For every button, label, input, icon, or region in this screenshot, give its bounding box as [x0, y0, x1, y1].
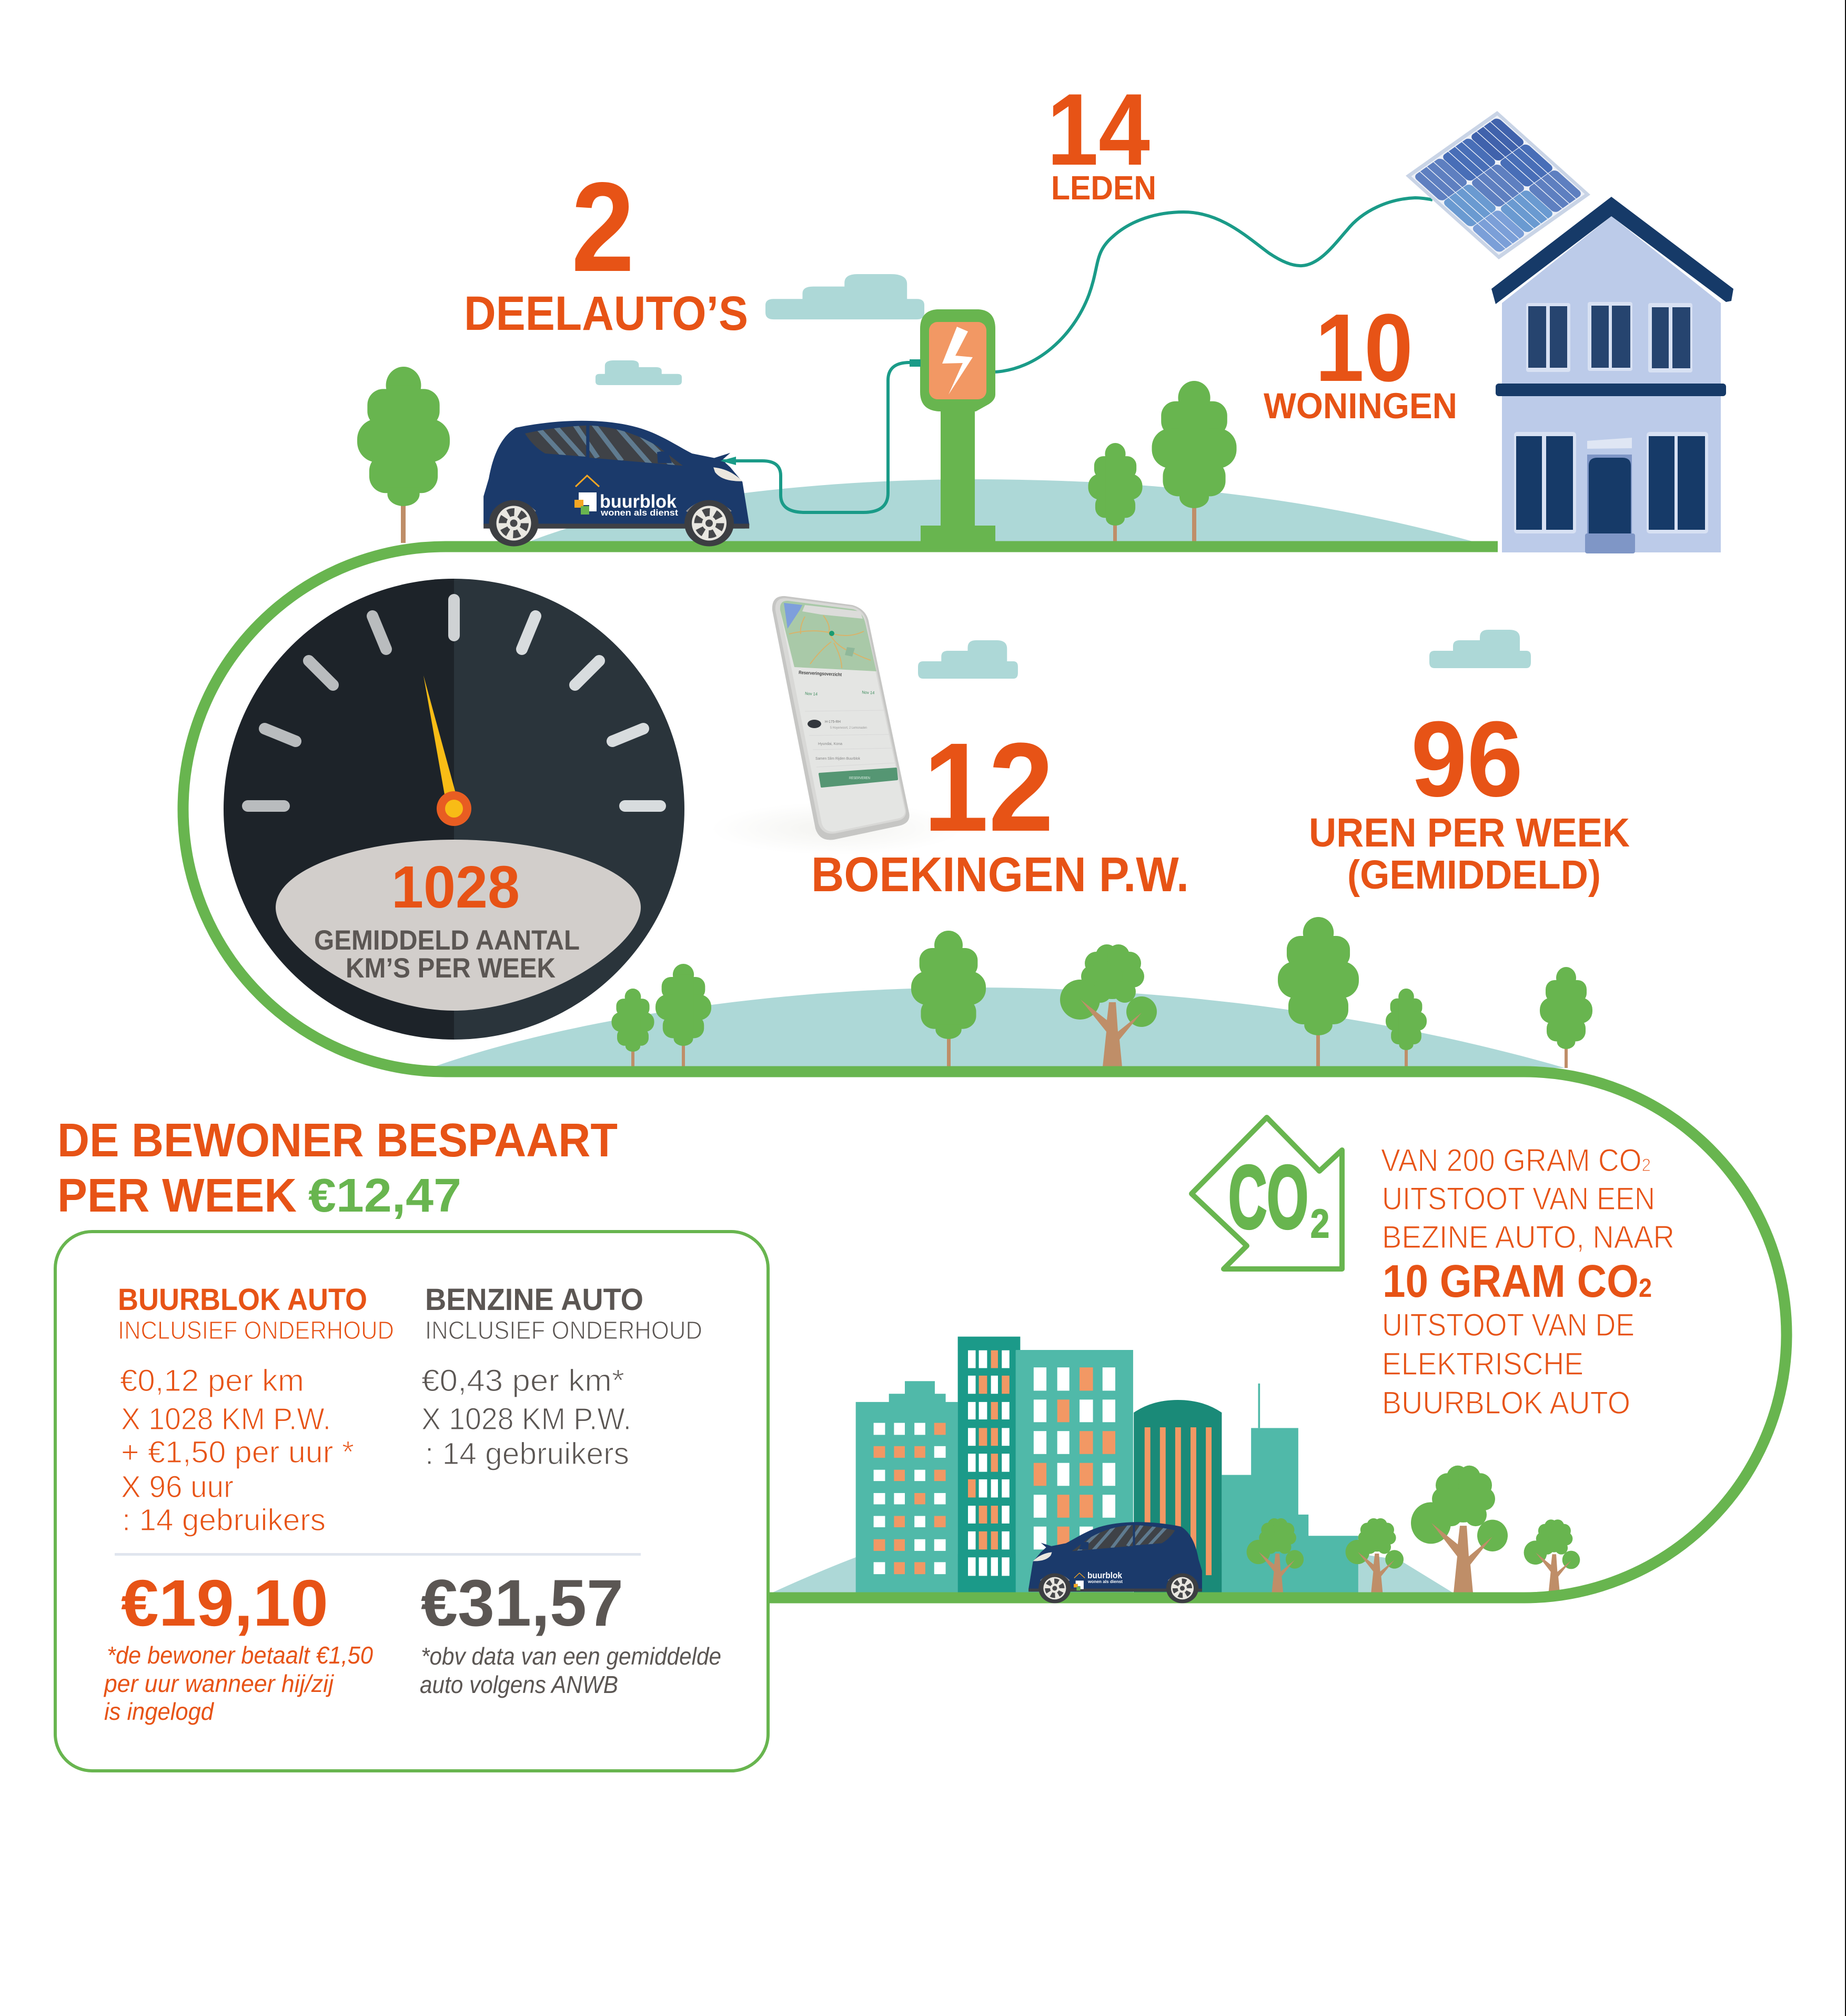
gauge ticks: [248, 600, 660, 806]
upper windows: [1526, 302, 1692, 372]
stat: 96 uren: (GEMIDDELD): [1347, 852, 1601, 898]
CO2 text block: 10 GRAM CO2: [1383, 1256, 1652, 1307]
app sheet text: [798, 670, 876, 700]
footnote: benzine: [420, 1642, 721, 1698]
savings heading: €12,47: [308, 1170, 461, 1222]
house: [1491, 197, 1733, 553]
CO2 text block: BEZINE AUTO, NAAR: [1382, 1219, 1674, 1255]
stat: 10 woningen: 10: [1315, 294, 1413, 401]
stat: 12 boekingen: [811, 717, 1189, 902]
hub: [437, 791, 471, 826]
column: benzine auto: [421, 1283, 702, 1471]
page edge line: [1845, 0, 1846, 2016]
cloud: small: [596, 360, 682, 385]
gauge caption: [314, 925, 580, 984]
tree: far left: [357, 367, 450, 543]
phone with app: RESERVEREN: [849, 777, 870, 780]
building B: [958, 1337, 1020, 1594]
car: buurblok large: wonen als dienst: [600, 508, 678, 518]
app sheet text: Reserveringsoverzicht: [799, 670, 842, 677]
icon: lightning bolt: [942, 327, 973, 395]
column: buurblok auto: X 1028 KM P.W.: [121, 1402, 331, 1436]
car: buurblok small: buurblok: [1087, 1570, 1122, 1580]
building A: [856, 1381, 958, 1594]
stat: 2 deelauto's: 2: [571, 156, 634, 298]
column: buurblok auto: X 96 uur: [121, 1470, 234, 1504]
building D: [1134, 1400, 1222, 1594]
total: benzine: €31,57: [421, 1567, 623, 1640]
tree: small by station: [1088, 443, 1143, 543]
column: benzine auto: X 1028 KM P.W.: [421, 1402, 631, 1436]
door: [1585, 438, 1635, 553]
gauge caption: KM’S PER WEEK: [346, 953, 556, 984]
column: buurblok auto: INCLUSIEF ONDERHOUD: [118, 1317, 394, 1345]
column: benzine auto: INCLUSIEF ONDERHOUD: [425, 1317, 702, 1345]
column: buurblok auto: + €1,50 per uur *: [121, 1435, 354, 1469]
charging station: [910, 309, 995, 541]
car: buurblok large: [483, 421, 749, 546]
cloud: by hours: [1429, 630, 1531, 668]
building C: [1016, 1350, 1133, 1594]
car: buurblok large: buurblok: [600, 491, 677, 512]
panel: cost comparison: [55, 1232, 768, 1771]
stat: 12 boekingen: 12: [923, 717, 1054, 858]
savings heading: DE BEWONER BESPAART: [57, 1114, 618, 1167]
app car row: Samen Slim Rijden Buurblok: [815, 757, 860, 761]
gauge caption: GEMIDDELD AANTAL: [314, 925, 580, 956]
CO2 text block: UITSTOOT VAN EEN: [1382, 1181, 1655, 1216]
stat: 10 woningen: WONINGEN: [1264, 386, 1457, 426]
column: benzine auto: : 14 gebruikers: [425, 1437, 629, 1471]
column: buurblok auto: BUURBLOK AUTO: [118, 1283, 367, 1317]
app map: [780, 601, 876, 671]
CO2 text block: VAN 200 GRAM CO2: [1381, 1143, 1651, 1178]
icon: CO2 house arrow: 2: [1310, 1202, 1329, 1246]
floor band: [1496, 384, 1726, 396]
CO2 text block: UITSTOOT VAN DE: [1382, 1307, 1635, 1343]
solar panel: [1406, 111, 1590, 259]
footnote: buurblok: is ingelogd: [104, 1698, 214, 1725]
app car row: H-175-RH: [825, 720, 841, 724]
car: buurblok small: [1028, 1522, 1202, 1603]
cloud: by phone: [918, 640, 1018, 679]
app car row: 5 Hoyenvoort, 2 Lemonaden: [830, 727, 867, 730]
column: benzine auto: BENZINE AUTO: [425, 1283, 643, 1317]
savings heading: [57, 1114, 618, 1222]
needle: [423, 676, 456, 794]
total: buurblok: €19,10: [121, 1567, 328, 1640]
footnote: benzine: *obv data van een gemiddelde: [421, 1642, 721, 1670]
stat: 14 leden: 14: [1047, 73, 1150, 187]
CO2 text block: [1381, 1143, 1674, 1420]
app sheet text: Nov 14: [805, 691, 818, 697]
car: buurblok small: wonen als dienst: [1087, 1579, 1123, 1584]
footnote: benzine: auto volgens ANWB: [420, 1671, 618, 1698]
footnote: buurblok: [103, 1641, 373, 1725]
hill: section two: [430, 987, 1565, 1068]
stat: 2 deelauto's: DEELAUTO’S: [464, 287, 748, 340]
footnote: buurblok: *de bewoner betaalt €1,50: [107, 1641, 373, 1669]
savings heading: PER WEEK: [57, 1170, 297, 1222]
tree: large by station: [1152, 381, 1236, 543]
cloud: large: [765, 274, 924, 319]
trees: section three: [1247, 1466, 1580, 1593]
app sheet text: Nov 14: [862, 690, 875, 695]
speedometer gauge: [224, 579, 684, 1040]
solar cable: [995, 198, 1433, 372]
icon: CO2 house arrow: [1192, 1117, 1342, 1269]
gauge value: 1028: [391, 854, 520, 920]
tree row: section two: [611, 917, 1592, 1068]
roof: [1491, 197, 1733, 304]
column: benzine auto: €0,43 per km*: [421, 1364, 624, 1398]
green road track: [183, 547, 1787, 1598]
app car row: [805, 710, 896, 767]
stat: 14 leden: LEDEN: [1051, 169, 1156, 207]
CO2 text block: ELEKTRISCHE: [1382, 1346, 1583, 1382]
footnote: buurblok: per uur wanneer hij/zij: [103, 1670, 335, 1697]
app button: [820, 769, 897, 787]
building E: [1222, 1384, 1358, 1594]
stat: 96 uren: UREN PER WEEK: [1309, 810, 1630, 855]
CO2 text block: BUURBLOK AUTO: [1382, 1385, 1630, 1420]
city buildings: [856, 1337, 1358, 1594]
stat: 2 deelauto's: [464, 156, 748, 340]
stat: 12 boekingen: BOEKINGEN P.W.: [811, 847, 1189, 902]
stat: 96 uren: [1309, 699, 1630, 898]
icon: CO2 house arrow: CO: [1228, 1147, 1308, 1247]
column: buurblok auto: : 14 gebruikers: [122, 1503, 326, 1537]
hill: section three: [769, 1552, 1455, 1594]
lower windows: [1514, 432, 1708, 533]
charge cable to car: [720, 362, 921, 512]
column: buurblok auto: [118, 1283, 394, 1537]
column: buurblok auto: €0,12 per km: [120, 1364, 304, 1398]
gauge label plate: [276, 840, 641, 1011]
stat: 10 woningen: [1264, 294, 1457, 426]
stat: 96 uren: 96: [1411, 699, 1523, 819]
app car row: Hyundai, Kona: [818, 742, 842, 746]
phone with app: [710, 596, 963, 855]
hill: section one: [526, 479, 1478, 543]
